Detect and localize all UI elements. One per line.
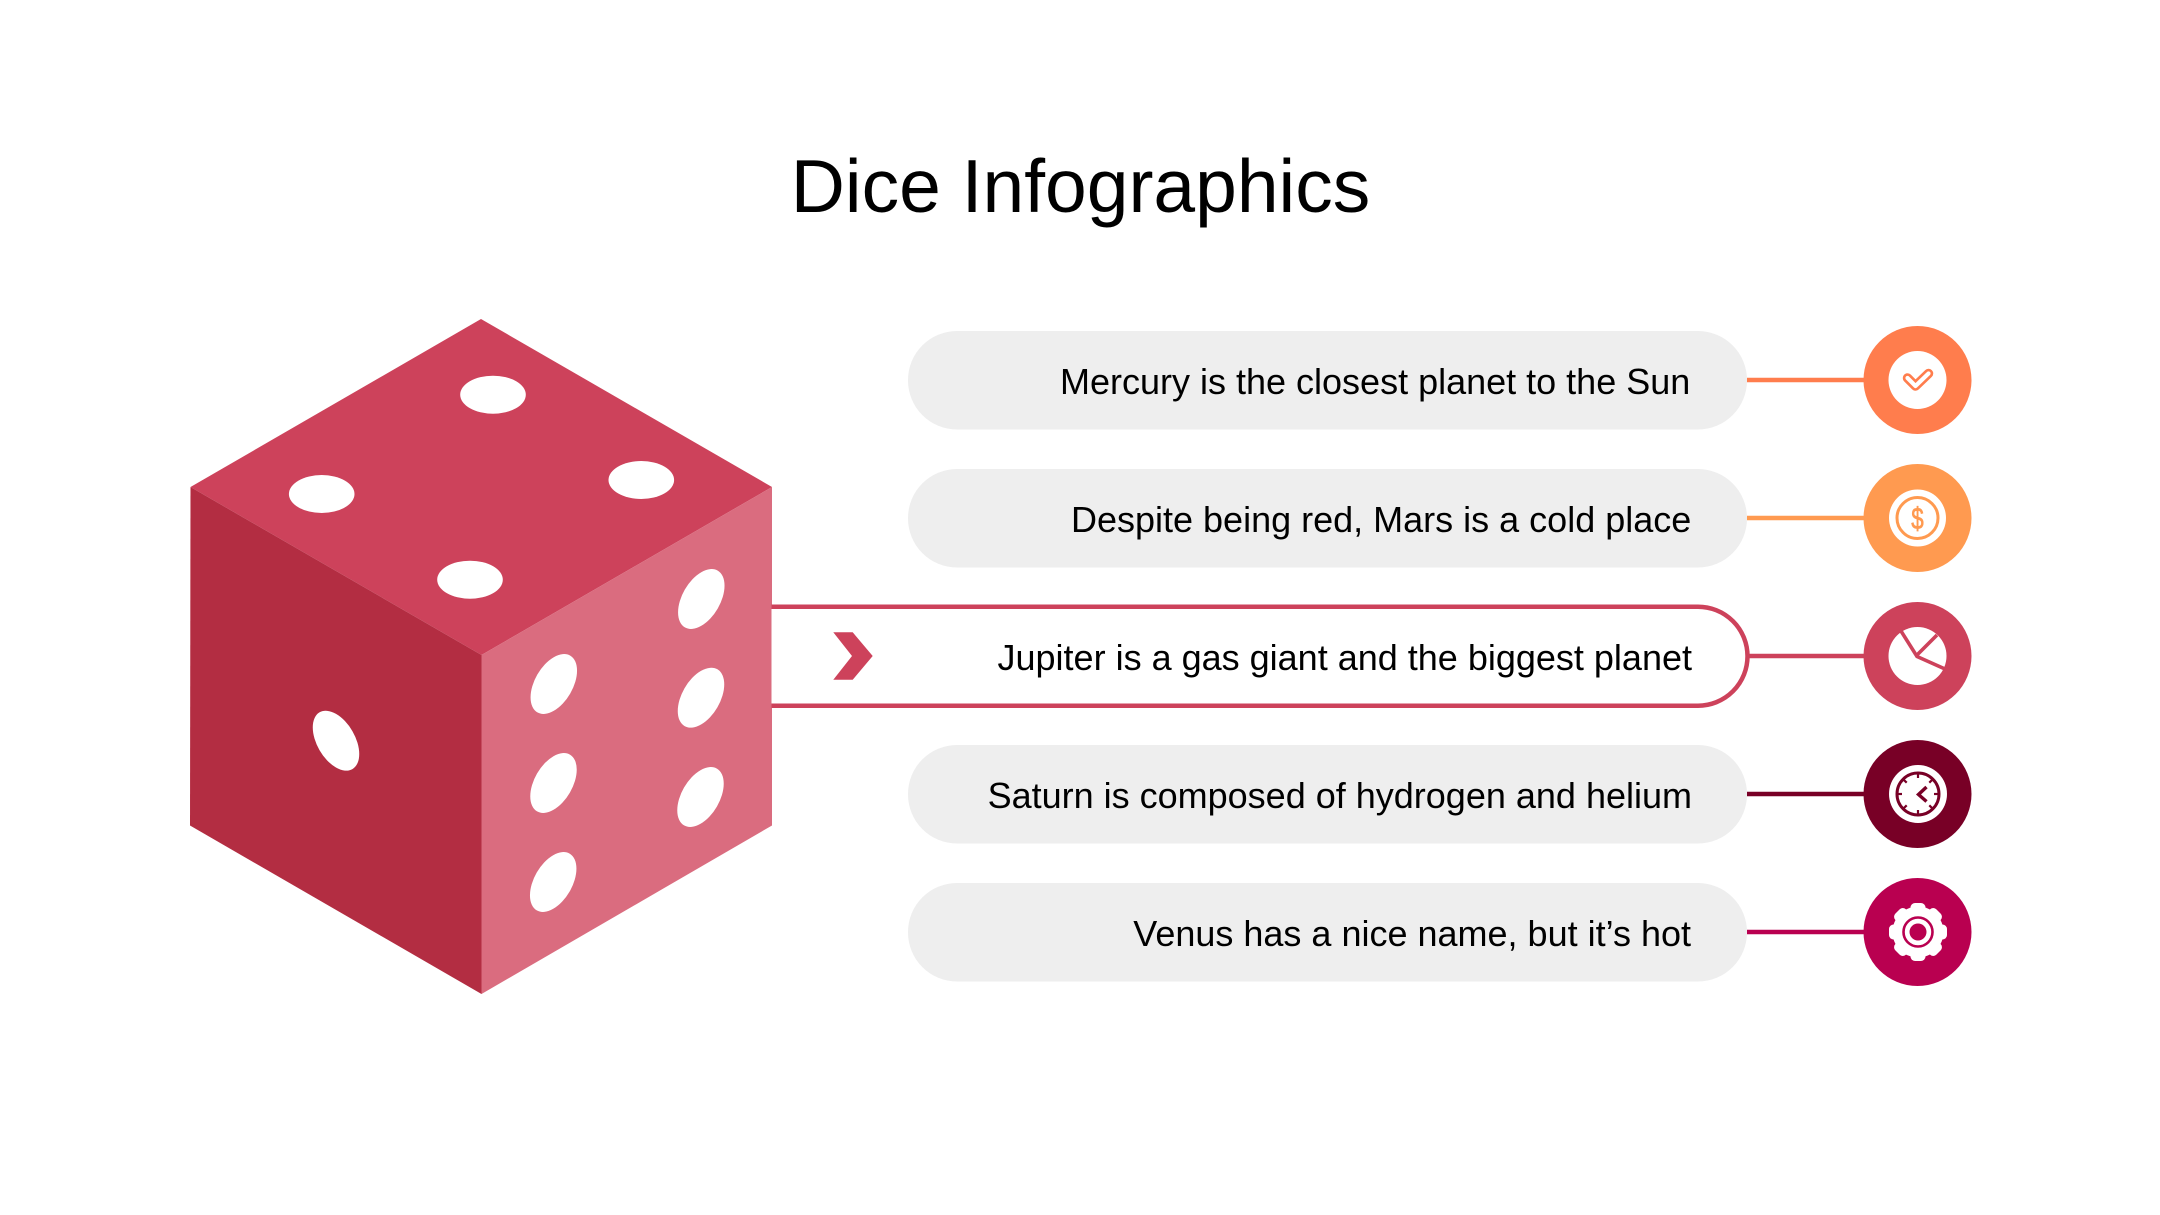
icon: dollar coin: $	[1911, 501, 1924, 536]
pill: Mars	[908, 469, 1747, 568]
chevron arrow	[833, 632, 873, 680]
icon: dollar coin	[1864, 464, 1972, 572]
text: Venus: Venus has a nice name, but it’s hot	[1133, 913, 1691, 954]
connector: Jupiter	[1749, 654, 1866, 658]
icon: clock	[1864, 740, 1972, 848]
icon: gear	[1864, 878, 1972, 986]
pill: Venus	[908, 883, 1747, 982]
pill: Mercury	[908, 331, 1747, 430]
connector: Mercury	[1747, 378, 1866, 382]
row 3: Jupiter (highlighted)	[772, 602, 1972, 710]
title: Dice Infographics	[791, 144, 1370, 228]
text: Mars: Despite being red, Mars is a cold place	[1071, 499, 1691, 540]
row 5: Venus	[908, 878, 1972, 986]
highlighted outline: Jupiter	[772, 607, 1748, 706]
row 2: Mars	[908, 464, 1972, 572]
row 1: Mercury	[908, 326, 1972, 434]
icon: check mark	[1864, 326, 1972, 434]
icon: pie chart	[1864, 602, 1972, 710]
connector: Mars	[1747, 516, 1866, 520]
pill: Saturn	[908, 745, 1747, 844]
die face: left with one pip	[190, 487, 482, 994]
connector: Venus	[1747, 930, 1866, 934]
die face: right with six pips	[482, 487, 772, 994]
row 4: Saturn	[908, 740, 1972, 848]
text: Saturn: Saturn is composed of hydrogen and helium	[988, 775, 1692, 816]
text: Jupiter: Jupiter is a gas giant and the biggest planet	[998, 637, 1692, 678]
connector: Saturn	[1747, 792, 1866, 796]
die face: top with four pips	[190, 319, 772, 655]
text: Mercury: Mercury is the closest planet to the Sun	[1060, 361, 1690, 402]
die illustration	[190, 319, 772, 994]
